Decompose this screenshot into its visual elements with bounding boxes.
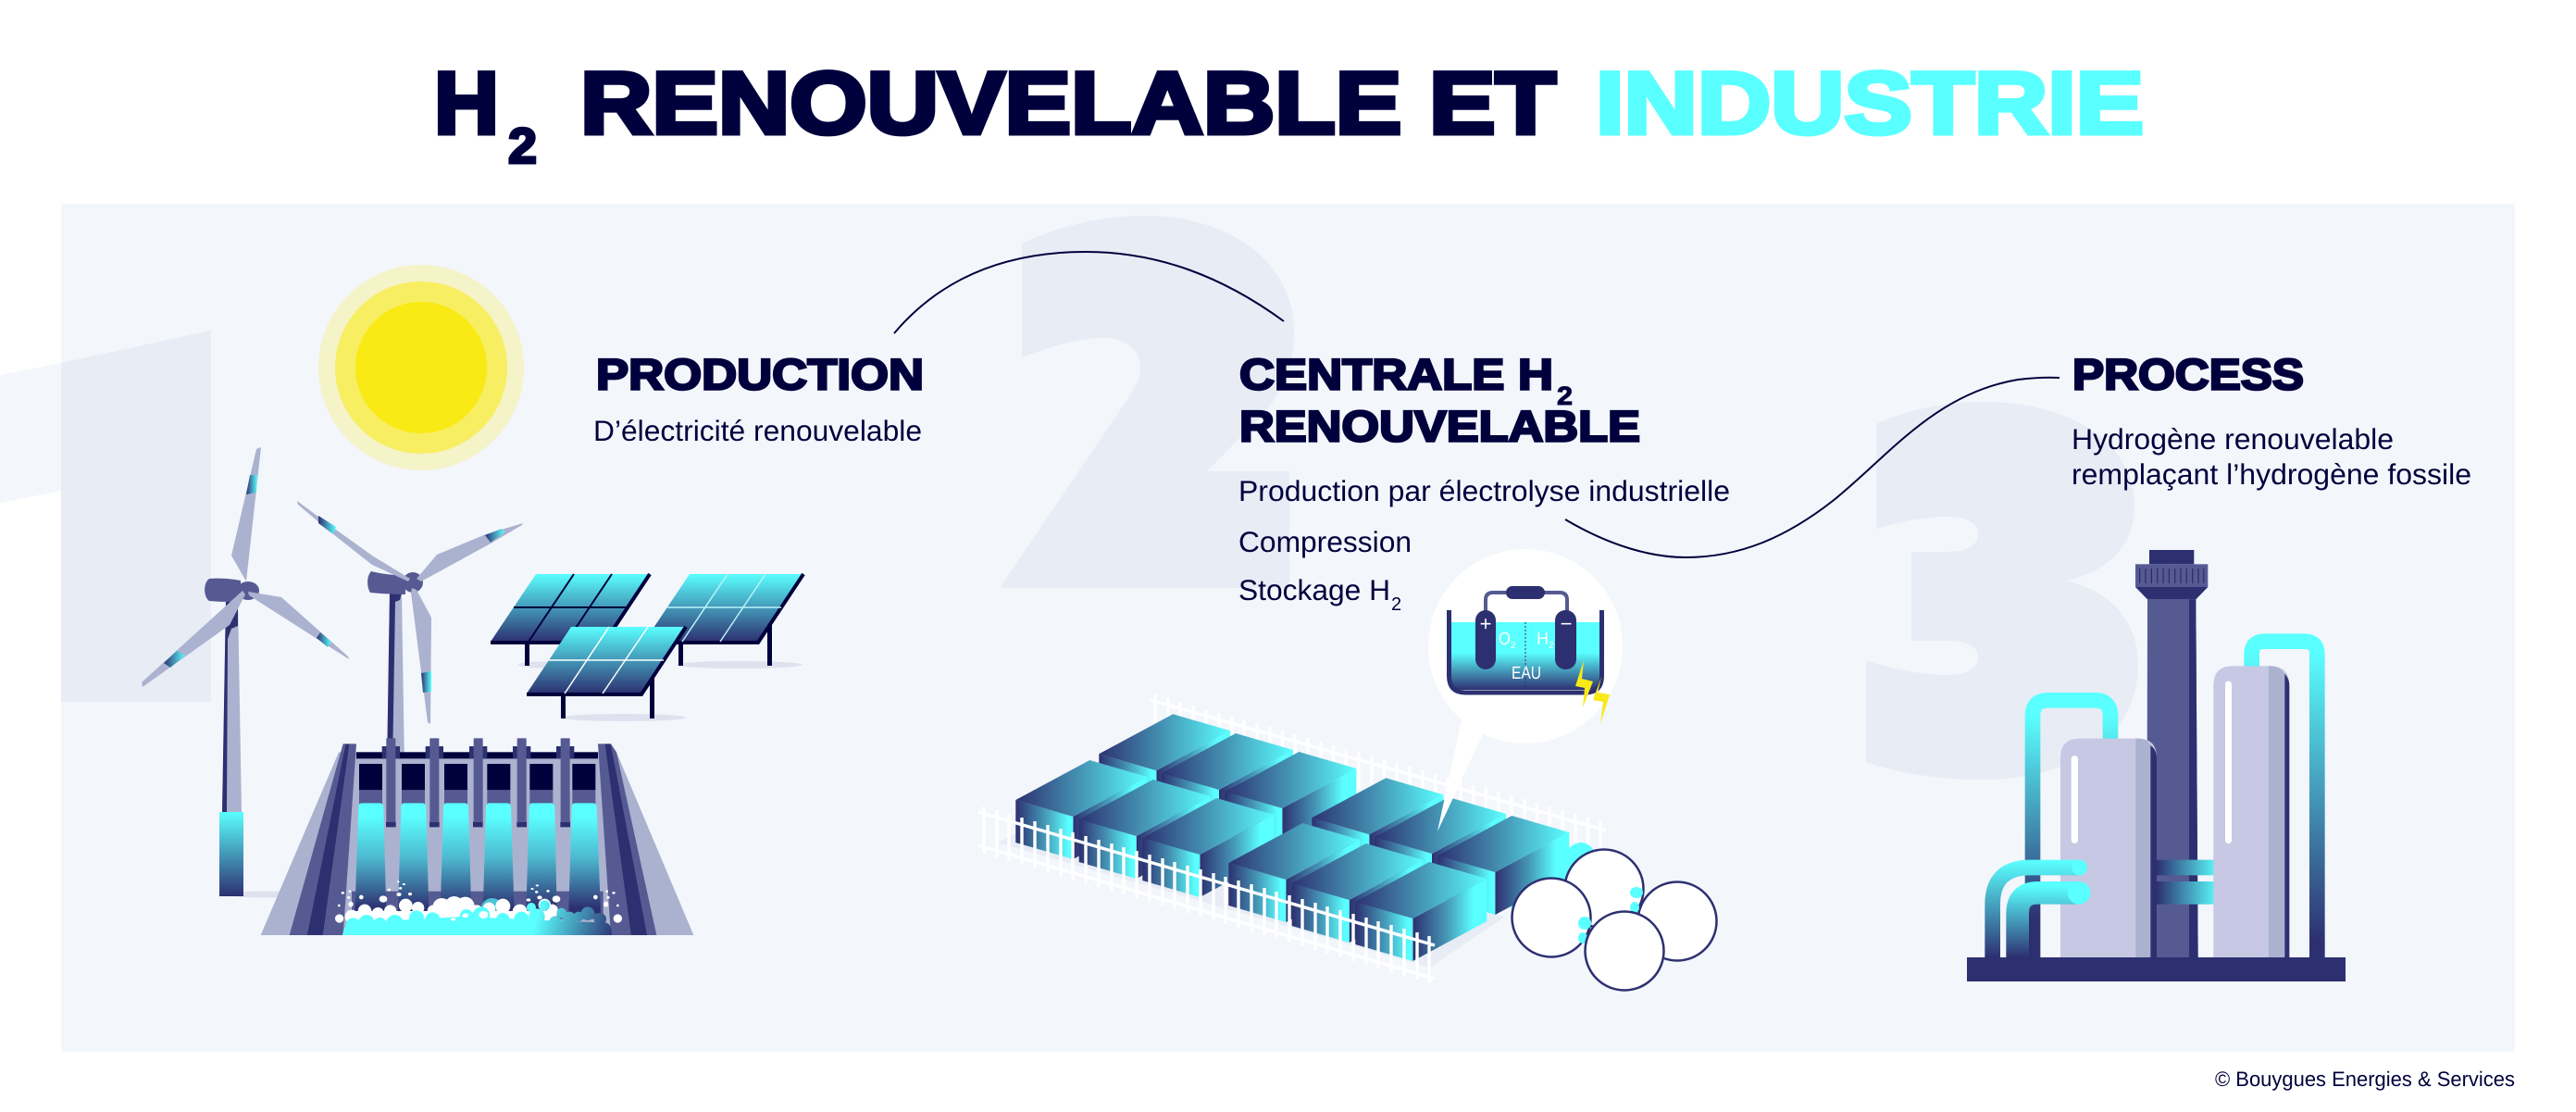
icon: lightning bolts (1575, 660, 1610, 724)
text block: centrale H2 renouvelable: CENTRALE H (1239, 350, 1553, 398)
cell labels: 2 (1549, 641, 1554, 651)
cell labels: O (1499, 630, 1511, 649)
dam gate windows (359, 764, 595, 790)
background panel (61, 204, 2515, 1052)
copyright: © Bouygues Energies & Services (2215, 1068, 2515, 1091)
cell labels (1480, 612, 1572, 683)
title: H (434, 55, 499, 153)
ground shadow (998, 833, 1505, 968)
solar panel front (527, 627, 686, 721)
solar panel back left (491, 574, 650, 668)
cyan pipe to spheres (1523, 856, 1581, 900)
left tank (2060, 739, 2157, 957)
cell labels: EAU (1512, 664, 1541, 683)
text block: centrale H2 renouvelable: RENOUVELABLE (1239, 402, 1640, 450)
illustration: wind turbine 1 (142, 447, 349, 898)
icon: sun (318, 265, 524, 470)
illustration: industrial process plant (1967, 550, 2346, 981)
text block: process (2072, 350, 2471, 491)
curved pipes front (1993, 860, 2090, 957)
connector curve 2 to 3 (1565, 378, 2060, 557)
text block: centrale H2 renouvelable: 2 (1557, 381, 1573, 410)
background numeral 2 (1000, 216, 1294, 588)
illustration: wind turbine 2 (297, 501, 523, 768)
electrodes and circuit (1475, 586, 1576, 669)
text block: centrale H2 renouvelable: Production par électrolyse industrielle (1238, 475, 1730, 507)
hydrogen storage spheres (1512, 850, 1716, 991)
title: INDUSTRIE (1596, 55, 2144, 153)
pipes behind tanks (2033, 642, 2317, 957)
water foam (342, 896, 612, 935)
cell labels: 2 (1511, 641, 1516, 651)
illustration: hydro dam (261, 738, 693, 935)
connector curve 1 to 2 (894, 252, 1284, 333)
text block: centrale H2 renouvelable: Stockage H (1238, 574, 1390, 606)
back fence (1151, 694, 1606, 858)
text block: centrale H2 renouvelable (1238, 350, 1730, 615)
cell labels: + (1480, 612, 1491, 635)
electrolyser blocks (1015, 714, 1569, 961)
callout: electrolysis cell (1428, 549, 1623, 831)
title: RENOUVELABLE ET (580, 55, 1556, 153)
background numeral 3 (1866, 402, 2138, 780)
front fence (978, 806, 1435, 983)
text block: centrale H2 renouvelable: 2 (1391, 594, 1401, 615)
solar panel back right (644, 574, 803, 668)
text block: centrale H2 renouvelable: Compression (1238, 526, 1412, 558)
water droplets (335, 881, 622, 923)
background numeral 1 (0, 331, 211, 702)
title (434, 55, 2144, 174)
chimney (2135, 550, 2208, 957)
connecting pipes (2157, 860, 2219, 905)
electrolysis water tank (1451, 622, 1599, 690)
dam pillars (382, 738, 574, 827)
text block: production (593, 350, 924, 447)
title: 2 (508, 119, 537, 174)
text block: process: PROCESS (2072, 350, 2304, 398)
illustration: solar panels (491, 574, 803, 721)
tall right tank (2213, 666, 2289, 957)
text block: process: remplaçant l’hydrogène fossile (2072, 458, 2471, 491)
text block: process: Hydrogène renouvelable (2072, 423, 2394, 456)
text block: production: D’électricité renouvelable (593, 415, 922, 447)
dam side walls (290, 743, 656, 935)
cell labels: − (1561, 612, 1572, 635)
cell labels: H (1537, 630, 1549, 649)
dam water falls (355, 803, 601, 914)
text block: production: PRODUCTION (596, 350, 924, 398)
illustration: hydrogen plant field (978, 694, 1716, 991)
plant base (1967, 957, 2346, 981)
